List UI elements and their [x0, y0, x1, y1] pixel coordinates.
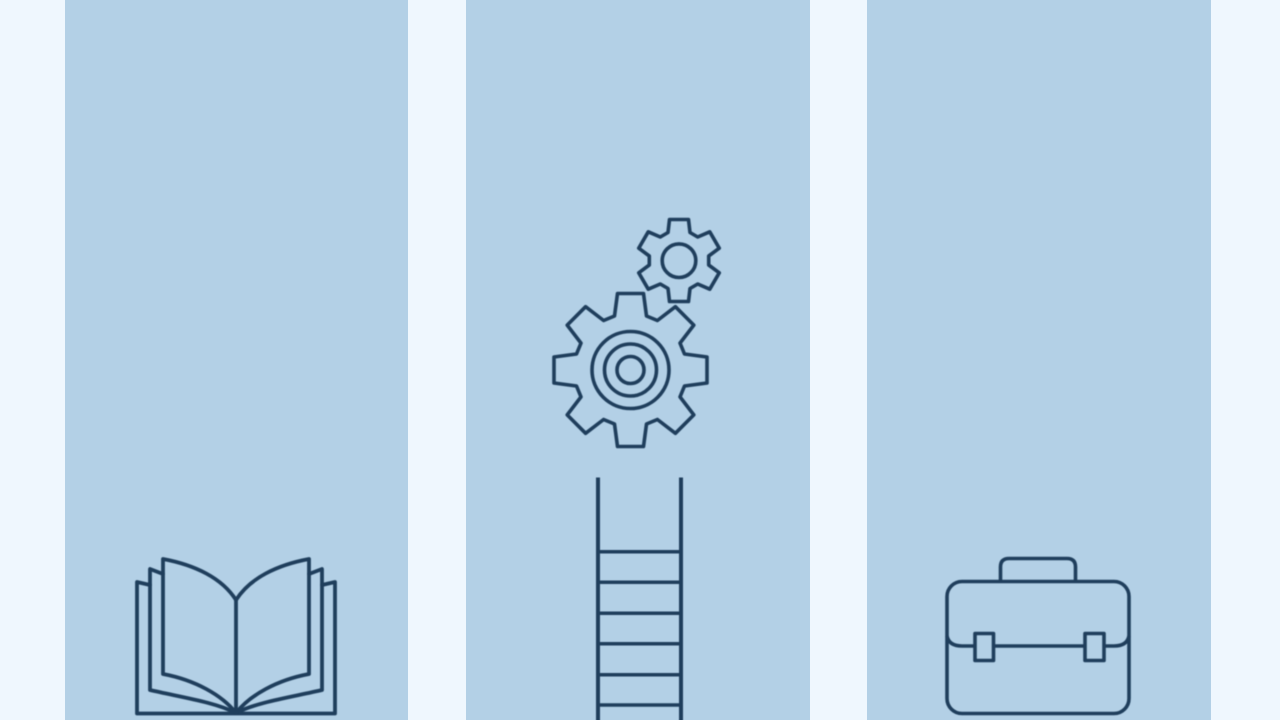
- icon: open book: [137, 559, 335, 714]
- panel: book column: [65, 0, 408, 720]
- icon: briefcase: [947, 558, 1129, 714]
- icon: large gear: [554, 294, 707, 446]
- icon: small gear: [639, 220, 719, 302]
- icon: ladder: [598, 478, 681, 720]
- panel: briefcase column: [867, 0, 1211, 720]
- panel: gears and ladder column: [466, 0, 810, 720]
